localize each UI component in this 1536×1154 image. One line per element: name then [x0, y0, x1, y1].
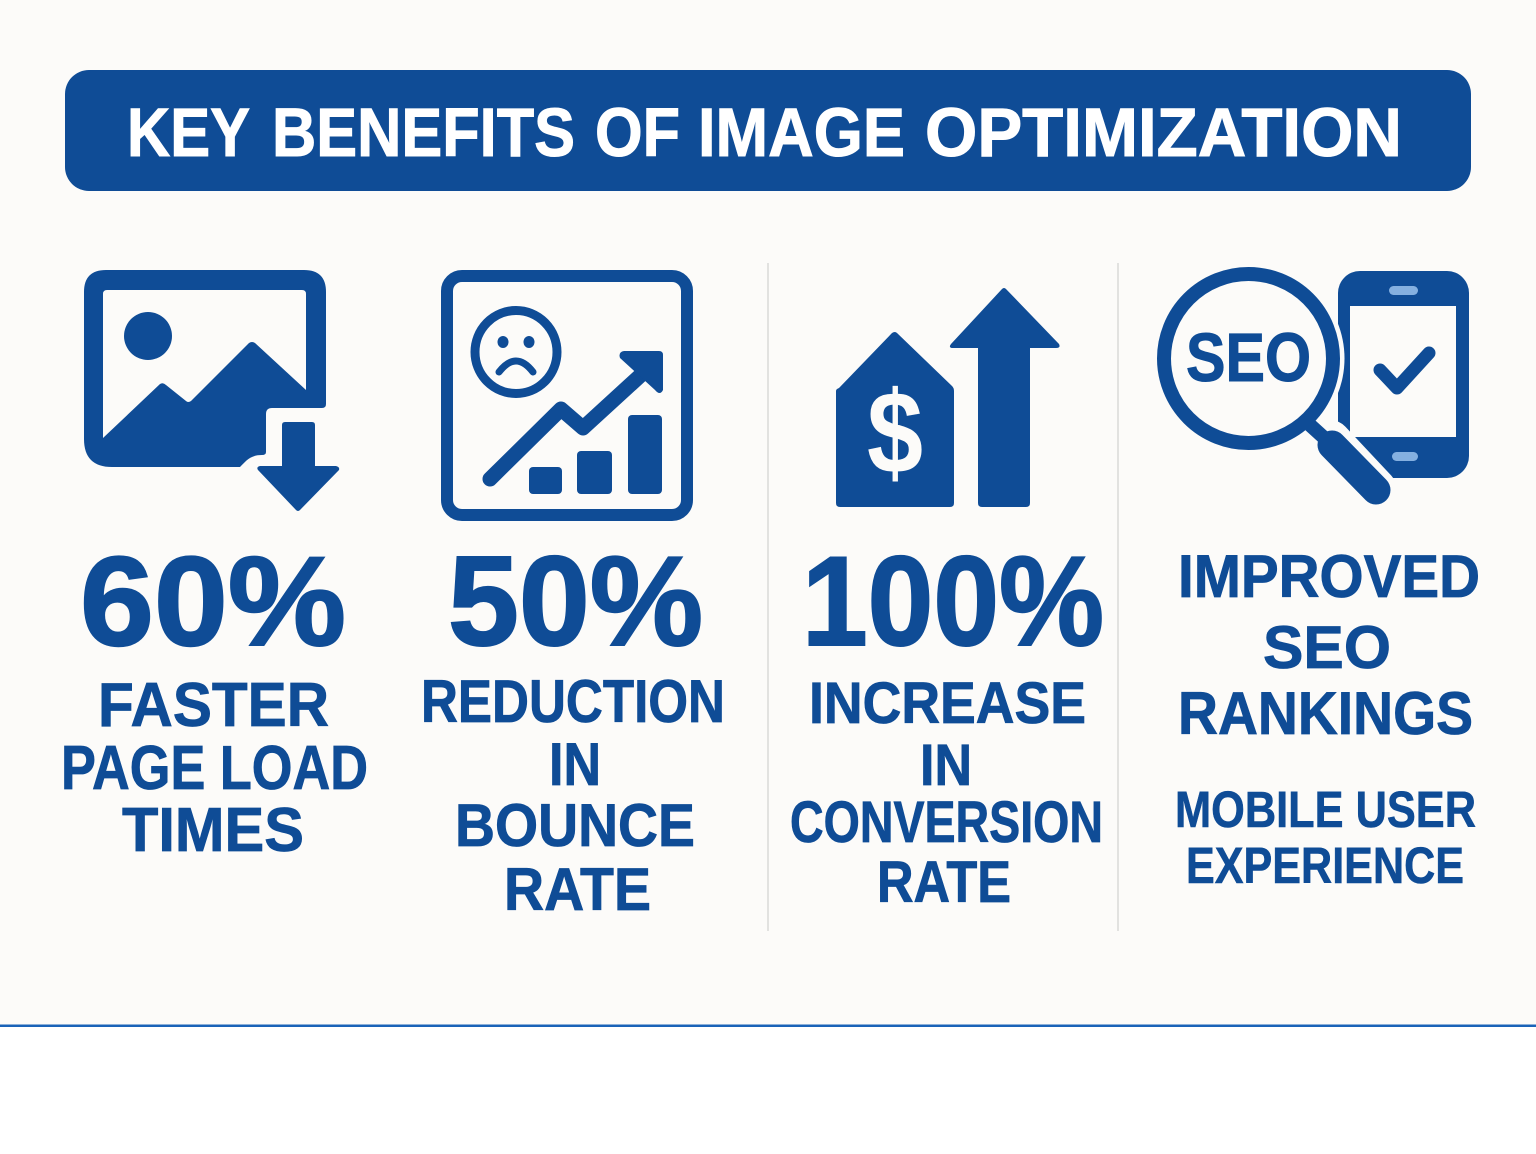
label: improved seo rankings: SEO	[1263, 614, 1391, 681]
title: OPTIMIZATION	[925, 94, 1402, 171]
label: reduction in bounce rate: RATE	[504, 856, 651, 923]
icon: price tag and up arrow	[836, 288, 1060, 507]
label: mobile user experience: MOBILE USER	[1175, 781, 1476, 838]
label: faster page load times	[61, 671, 368, 865]
panel: seo and mobile	[1152, 262, 1480, 894]
label: increase in conversion rate: INCREASE	[809, 671, 1086, 736]
panel: conversion rate	[790, 288, 1104, 915]
label: faster page load times: FASTER	[98, 671, 329, 740]
icon: magnifier with SEO and phone: SEO	[1186, 319, 1311, 396]
label: increase in conversion rate: RATE	[877, 850, 1011, 915]
title: KEY	[127, 94, 250, 171]
icon: magnifier with SEO and phone	[1152, 262, 1469, 490]
stat: 100%: 100%	[802, 530, 1104, 672]
label: improved seo rankings	[1178, 543, 1480, 747]
label: reduction in bounce rate: BOUNCE	[455, 792, 695, 859]
stat: 60%: 60%	[80, 530, 346, 672]
title: BENEFITS	[272, 94, 575, 171]
title banner	[65, 70, 1471, 191]
label: reduction in bounce rate	[421, 668, 725, 923]
label: reduction in bounce rate: REDUCTION	[421, 668, 725, 735]
icon: image with download arrow	[84, 270, 339, 511]
title: OF	[595, 94, 680, 171]
label: improved seo rankings: RANKINGS	[1178, 680, 1473, 747]
label: increase in conversion rate: CONVERSION	[790, 790, 1103, 855]
label: increase in conversion rate: IN	[920, 733, 972, 798]
title: IMAGE	[698, 94, 905, 171]
icon: sad face with chart	[447, 276, 687, 515]
label: improved seo rankings: IMPROVED	[1178, 543, 1480, 610]
label: mobile user experience: EXPERIENCE	[1186, 837, 1464, 894]
title	[127, 94, 1402, 171]
label: faster page load times: PAGE LOAD	[61, 734, 368, 803]
label: reduction in bounce rate: IN	[549, 731, 601, 798]
label: mobile user experience	[1175, 781, 1476, 894]
panel: faster page load	[61, 270, 368, 865]
label: increase in conversion rate	[790, 671, 1103, 915]
stat: 50%: 50%	[448, 530, 703, 672]
panel: bounce rate	[421, 276, 725, 923]
label: faster page load times: TIMES	[122, 796, 304, 865]
icon: price tag and up arrow: $	[867, 367, 923, 498]
